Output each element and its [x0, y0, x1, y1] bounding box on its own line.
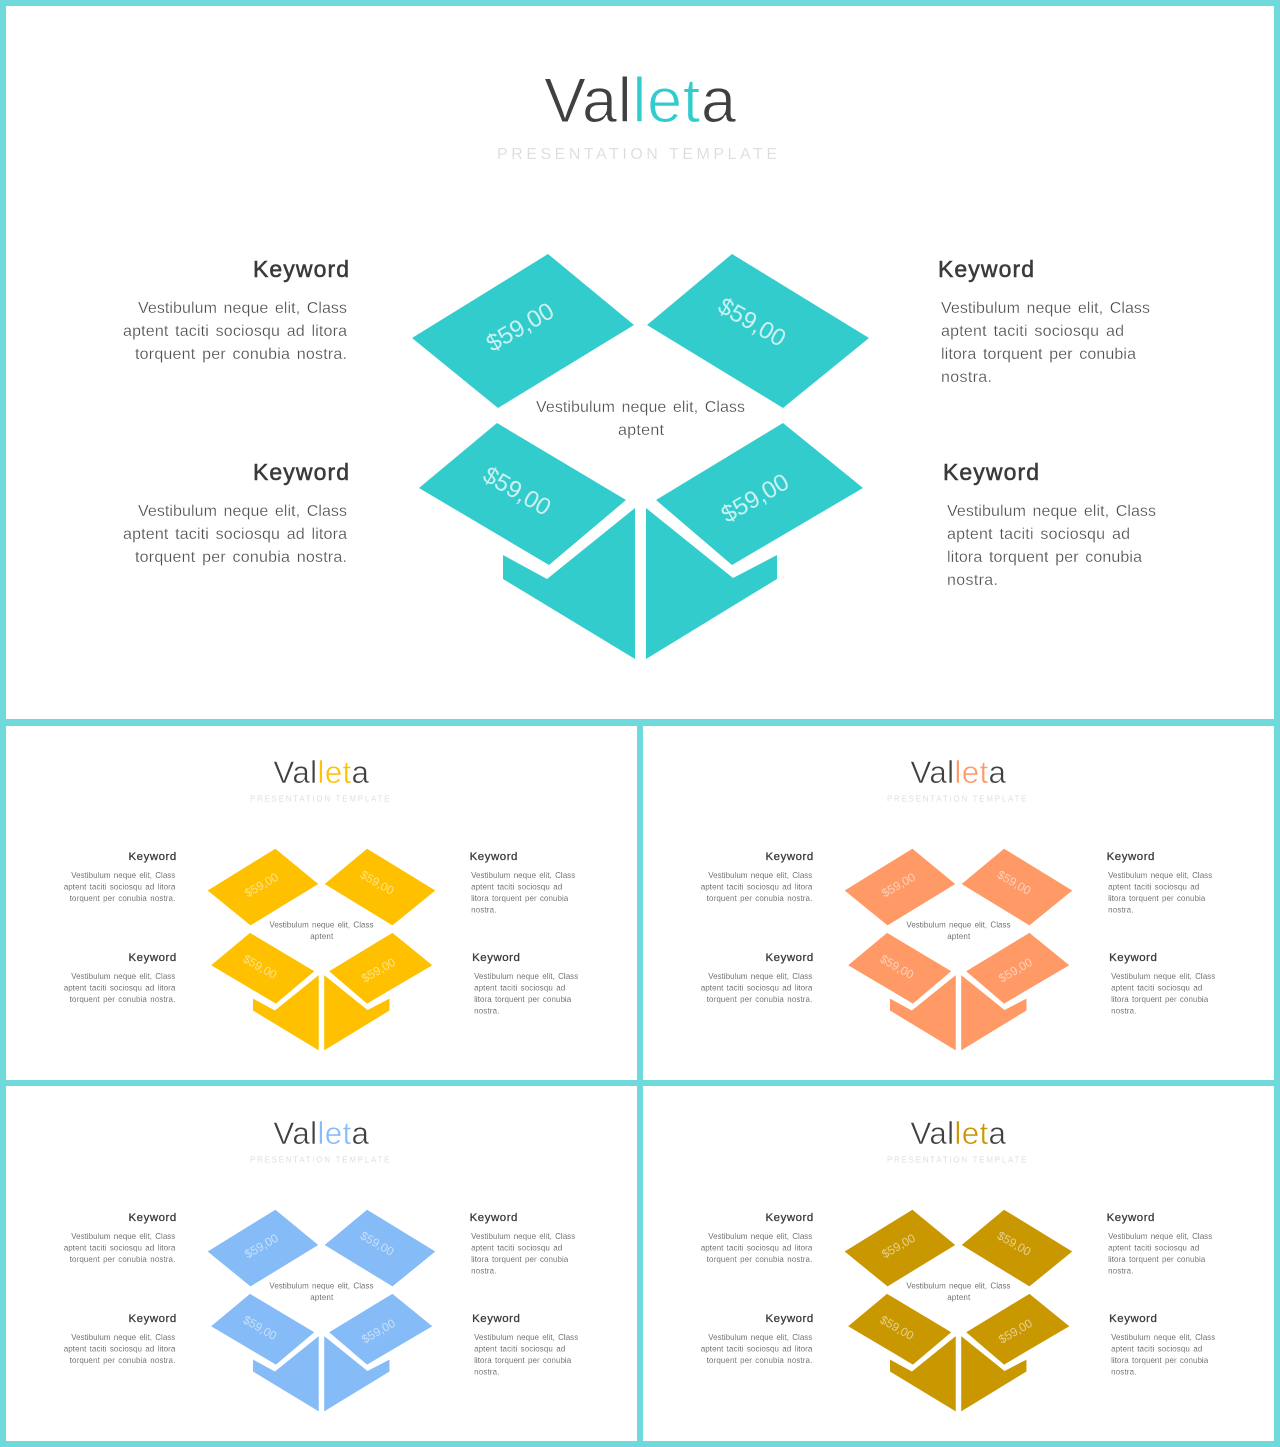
text block: top right: litora torquent per conubia: [471, 1255, 569, 1264]
text block: top left: [123, 256, 349, 363]
price labels: $59,00: [478, 461, 555, 522]
text block: bottom left: aptent taciti sociosqu ad litora: [64, 984, 176, 993]
text block: top right: Vestibulum neque elit, Class: [471, 871, 575, 880]
text block: top left: torquent per conubia nostra.: [70, 1255, 175, 1264]
text block: bottom left: aptent taciti sociosqu ad litora: [64, 1345, 176, 1354]
title: Valleta: [910, 755, 1007, 790]
panel: main teal slide: [123, 66, 1156, 659]
text block: bottom right: litora torquent per conubia: [947, 549, 1142, 566]
text block: bottom left: aptent taciti sociosqu ad litora: [701, 984, 813, 993]
text block: top right: Keyword: [1107, 1212, 1154, 1224]
price labels: $59,00: [358, 867, 397, 898]
text block: top right: nostra.: [471, 1266, 497, 1275]
text block: top right: aptent taciti sociosqu ad: [941, 323, 1124, 340]
text block: top right: Vestibulum neque elit, Class: [941, 300, 1150, 317]
subtitle: PRESENTATION TEMPLATE: [887, 794, 1026, 803]
price labels: $59,00: [359, 1316, 398, 1346]
panel: yellow slide: [64, 755, 578, 1050]
price labels: $59,00: [879, 1231, 918, 1261]
text block: top right: [1107, 851, 1212, 914]
price labels: $59,00: [996, 955, 1035, 985]
text block: top left: aptent taciti sociosqu ad litora: [64, 883, 176, 892]
subtitle: PRESENTATION TEMPLATE: [250, 794, 389, 803]
center caption: Vestibulum neque elit, Class: [906, 1281, 1011, 1290]
text block: top left: Vestibulum neque elit, Class: [71, 871, 175, 880]
text block: bottom left: torquent per conubia nostra.: [135, 549, 347, 566]
text block: top right: Vestibulum neque elit, Class: [1108, 1232, 1212, 1241]
box diagram: [845, 849, 1072, 1050]
text block: bottom right: aptent taciti sociosqu ad: [1111, 984, 1202, 993]
text block: top right: litora torquent per conubia: [471, 894, 569, 903]
price labels: $59,00: [878, 1313, 917, 1343]
price labels: [241, 1228, 398, 1346]
text block: top left: torquent per conubia nostra.: [707, 894, 812, 903]
subtitle: PRESENTATION TEMPLATE: [887, 1155, 1026, 1164]
text block: top right: nostra.: [1108, 905, 1134, 914]
box diagram: [208, 1210, 435, 1411]
center caption: aptent: [618, 422, 665, 439]
text block: top right: Vestibulum neque elit, Class: [1108, 871, 1212, 880]
text block: bottom right: aptent taciti sociosqu ad: [474, 984, 565, 993]
text block: top right: [470, 1212, 575, 1275]
price labels: $59,00: [713, 292, 790, 353]
text block: top left: [701, 851, 813, 903]
text block: bottom right: nostra.: [1111, 1007, 1137, 1016]
text block: bottom left: torquent per conubia nostra.: [70, 1356, 175, 1365]
text block: bottom left: torquent per conubia nostra.: [70, 995, 175, 1004]
text block: top right: Keyword: [470, 851, 517, 863]
text block: top left: Keyword: [128, 851, 176, 863]
text block: top left: torquent per conubia nostra.: [707, 1255, 812, 1264]
text block: bottom right: Vestibulum neque elit, Class: [1111, 972, 1215, 981]
price labels: $59,00: [242, 870, 281, 900]
text block: bottom right: nostra.: [474, 1007, 500, 1016]
text block: top right: Vestibulum neque elit, Class: [471, 1232, 575, 1241]
subtitle: PRESENTATION TEMPLATE: [250, 1155, 389, 1164]
text block: bottom right: Keyword: [943, 459, 1039, 485]
text block: bottom left: Keyword: [128, 1313, 176, 1325]
panel: orange slide: [701, 755, 1215, 1050]
price labels: $59,00: [359, 955, 398, 985]
center caption: [536, 399, 745, 439]
center caption: Vestibulum neque elit, Class: [906, 920, 1011, 929]
center caption: aptent: [947, 932, 971, 941]
text block: bottom left: [701, 952, 813, 1004]
text block: bottom right: Vestibulum neque elit, Class: [474, 972, 578, 981]
text block: top left: Keyword: [765, 851, 813, 863]
box diagram: [208, 849, 435, 1050]
text block: bottom right: litora torquent per conubia: [1111, 995, 1209, 1004]
text block: top right: aptent taciti sociosqu ad: [471, 883, 562, 892]
price labels: [241, 867, 398, 985]
text block: bottom right: Vestibulum neque elit, Class: [1111, 1333, 1215, 1342]
price labels: [878, 867, 1035, 985]
text block: top left: Vestibulum neque elit, Class: [71, 1232, 175, 1241]
text block: bottom right: [472, 952, 578, 1016]
text block: top right: litora torquent per conubia: [1108, 894, 1206, 903]
text block: top right: nostra.: [471, 905, 497, 914]
text block: bottom right: Vestibulum neque elit, Class: [947, 503, 1156, 520]
title: Valleta: [273, 1116, 370, 1151]
text block: top right: litora torquent per conubia: [1108, 1255, 1206, 1264]
title: Valleta: [544, 66, 737, 136]
text block: bottom right: litora torquent per conubia: [474, 995, 572, 1004]
center caption: [906, 920, 1011, 941]
price labels: $59,00: [242, 1231, 281, 1261]
text block: bottom left: [64, 1313, 176, 1365]
text block: bottom left: Keyword: [253, 459, 349, 485]
text block: bottom left: Vestibulum neque elit, Class: [71, 1333, 175, 1342]
price labels: $59,00: [241, 952, 280, 982]
text block: bottom right: Keyword: [472, 1313, 520, 1325]
center caption: Vestibulum neque elit, Class: [269, 1281, 374, 1290]
text block: top left: Keyword: [128, 1212, 176, 1224]
price labels: $59,00: [482, 297, 559, 358]
price labels: $59,00: [995, 867, 1034, 898]
text block: bottom left: Vestibulum neque elit, Class: [138, 503, 347, 520]
text block: top left: aptent taciti sociosqu ad litora: [701, 883, 813, 892]
text block: top right: Keyword: [1107, 851, 1154, 863]
text block: top right: nostra.: [941, 369, 992, 386]
box diagram: [845, 1210, 1072, 1411]
text block: top right: [1107, 1212, 1212, 1275]
text block: top left: [64, 1212, 176, 1264]
text block: bottom right: aptent taciti sociosqu ad: [474, 1345, 565, 1354]
text block: top left: Vestibulum neque elit, Class: [708, 871, 812, 880]
text block: bottom left: torquent per conubia nostra.: [707, 1356, 812, 1365]
center caption: Vestibulum neque elit, Class: [269, 920, 374, 929]
text block: bottom right: Keyword: [472, 952, 520, 964]
text block: top right: aptent taciti sociosqu ad: [1108, 1244, 1199, 1253]
text block: top right: [938, 256, 1150, 386]
text block: top left: [701, 1212, 813, 1264]
center caption: Vestibulum neque elit, Class: [536, 399, 745, 416]
text block: top right: Keyword: [938, 256, 1034, 282]
center caption: aptent: [310, 1293, 334, 1302]
price labels: $59,00: [879, 870, 918, 900]
text block: bottom right: litora torquent per conubia: [474, 1356, 572, 1365]
text block: bottom right: [1109, 1313, 1215, 1377]
price labels: [878, 1228, 1035, 1346]
text block: bottom right: Keyword: [1109, 1313, 1157, 1325]
text block: top left: aptent taciti sociosqu ad litora: [64, 1244, 176, 1253]
text block: top left: [64, 851, 176, 903]
text block: bottom right: Vestibulum neque elit, Class: [474, 1333, 578, 1342]
text block: bottom left: torquent per conubia nostra.: [707, 995, 812, 1004]
title: Valleta: [910, 1116, 1007, 1151]
price labels: $59,00: [995, 1228, 1034, 1259]
text block: bottom left: Vestibulum neque elit, Class: [71, 972, 175, 981]
price labels: $59,00: [717, 468, 794, 529]
text block: top left: Keyword: [765, 1212, 813, 1224]
text block: top left: aptent taciti sociosqu ad litora: [701, 1244, 813, 1253]
center caption: aptent: [310, 932, 334, 941]
text block: bottom left: Keyword: [765, 1313, 813, 1325]
text block: top right: [470, 851, 575, 914]
price labels: $59,00: [358, 1228, 397, 1259]
center caption: [906, 1281, 1011, 1302]
text block: bottom left: [123, 459, 349, 566]
text block: bottom left: [701, 1313, 813, 1365]
text block: top left: Vestibulum neque elit, Class: [708, 1232, 812, 1241]
text block: top right: nostra.: [1108, 1266, 1134, 1275]
text block: bottom left: Keyword: [765, 952, 813, 964]
subtitle: PRESENTATION TEMPLATE: [497, 146, 777, 163]
text block: bottom right: nostra.: [1111, 1368, 1137, 1377]
text block: bottom left: aptent taciti sociosqu ad litora: [701, 1345, 813, 1354]
text block: bottom left: Vestibulum neque elit, Class: [708, 1333, 812, 1342]
text block: top right: Keyword: [470, 1212, 517, 1224]
panel: blue slide: [64, 1116, 578, 1411]
price labels: $59,00: [996, 1316, 1035, 1346]
text block: bottom left: [64, 952, 176, 1004]
box diagram: [412, 254, 869, 659]
text block: bottom right: litora torquent per conubia: [1111, 1356, 1209, 1365]
text block: bottom right: aptent taciti sociosqu ad: [1111, 1345, 1202, 1354]
text block: top left: Keyword: [253, 256, 349, 282]
center caption: aptent: [947, 1293, 971, 1302]
center caption: [269, 920, 374, 941]
text block: bottom right: aptent taciti sociosqu ad: [947, 526, 1130, 543]
text block: top right: aptent taciti sociosqu ad: [471, 1244, 562, 1253]
text block: top right: aptent taciti sociosqu ad: [1108, 883, 1199, 892]
text block: top left: torquent per conubia nostra.: [70, 894, 175, 903]
text block: top left: torquent per conubia nostra.: [135, 346, 347, 363]
text block: bottom left: Keyword: [128, 952, 176, 964]
text block: bottom right: [943, 459, 1156, 589]
text block: top left: Vestibulum neque elit, Class: [138, 300, 347, 317]
text block: bottom left: Vestibulum neque elit, Class: [708, 972, 812, 981]
text block: bottom left: aptent taciti sociosqu ad litora: [123, 526, 347, 543]
price labels: $59,00: [241, 1313, 280, 1343]
text block: bottom right: [1109, 952, 1215, 1016]
text block: bottom right: Keyword: [1109, 952, 1157, 964]
text block: top right: litora torquent per conubia: [941, 346, 1136, 363]
price labels: [478, 292, 794, 529]
text block: bottom right: nostra.: [474, 1368, 500, 1377]
panel: gold slide: [701, 1116, 1215, 1411]
center caption: [269, 1281, 374, 1302]
text block: top left: aptent taciti sociosqu ad litora: [123, 323, 347, 340]
title: Valleta: [273, 755, 370, 790]
text block: bottom right: nostra.: [947, 572, 998, 589]
price labels: $59,00: [878, 952, 917, 982]
text block: bottom right: [472, 1313, 578, 1377]
